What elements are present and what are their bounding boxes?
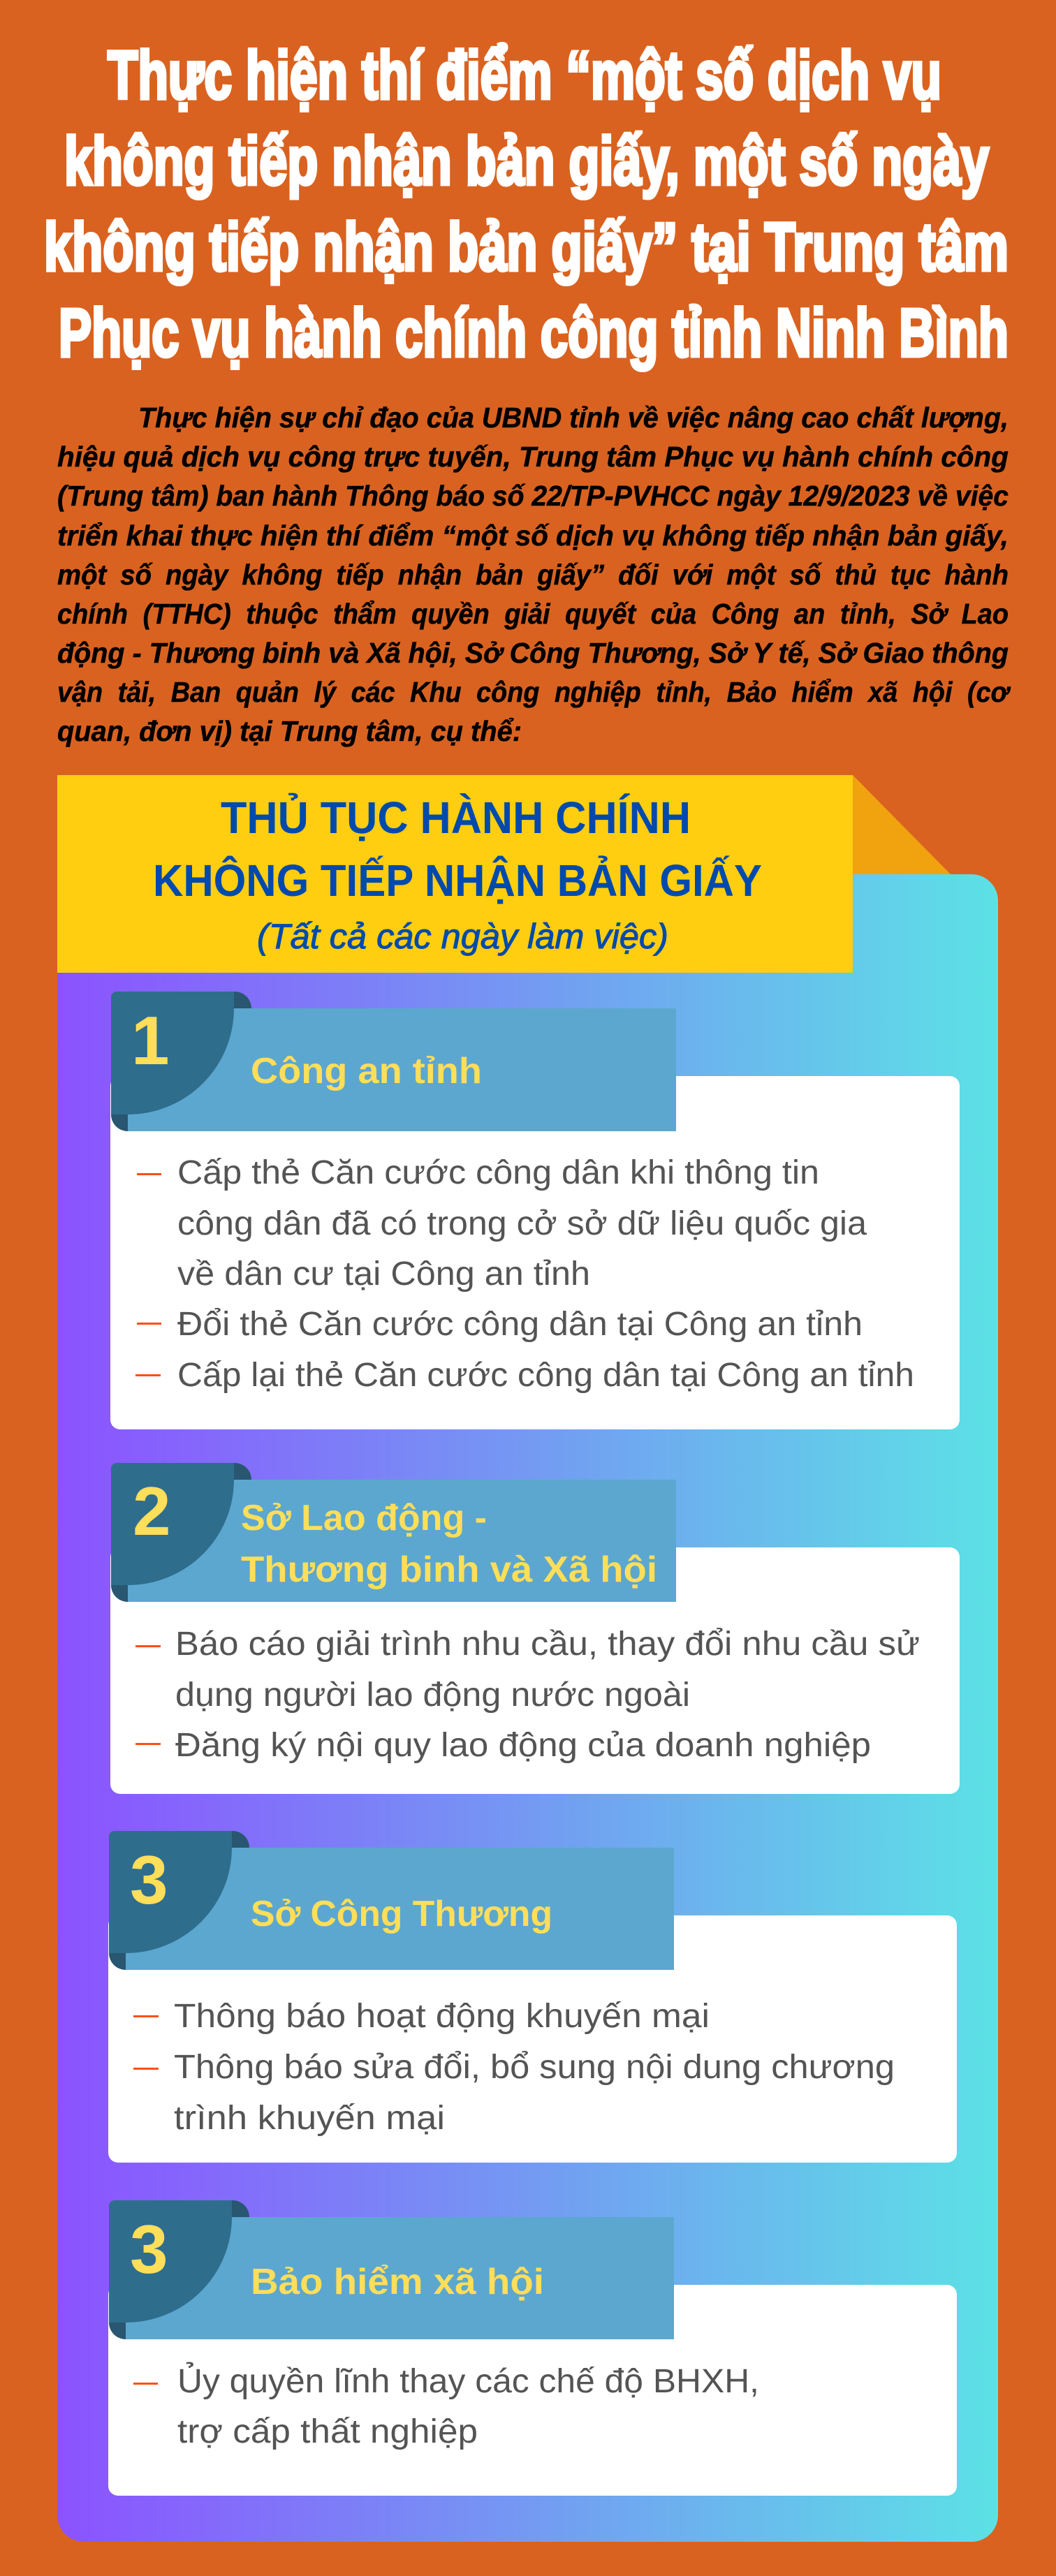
card 3: Sở Công Thương: Thông báo sửa đổi, bổ sung nội dung chương <box>174 2049 895 2086</box>
fold triangle behind header <box>853 775 951 875</box>
header banner: KHÔNG TIẾP NHẬN BẢN GIẤY <box>153 855 762 906</box>
card 2: Sở Lao động - Thương binh và Xã hội: Sở Lao động - <box>241 1498 487 1538</box>
card 2: Sở Lao động - Thương binh và Xã hội: Báo cáo giải trình nhu cầu, thay đổi nhu cầu sử <box>175 1626 920 1663</box>
card 3: Sở Công Thương: trình khuyến mại <box>174 2100 445 2137</box>
card 3: Sở Công Thương <box>108 1831 957 2163</box>
card 1: Công an tỉnh <box>110 992 960 1429</box>
card 4: Bảo hiểm xã hội: Ủy quyền lĩnh thay các chế độ BHXH, <box>177 2362 759 2400</box>
card 2: Sở Lao động - Thương binh và Xã hội: dụng người lao động nước ngoài <box>175 1677 690 1714</box>
card 1: Công an tỉnh: Cấp lại thẻ Căn cước công dân tại Công an tỉnh <box>177 1357 914 1394</box>
card 3: Sở Công Thương: 3 <box>130 1841 168 1918</box>
card 1: Công an tỉnh: Công an tỉnh <box>251 1051 482 1091</box>
card 3: Sở Công Thương: Sở Công Thương <box>251 1894 552 1934</box>
header banner: (Tất cả các ngày làm việc) <box>257 917 668 956</box>
header banner: THỦ TỤC HÀNH CHÍNH <box>221 792 691 843</box>
card 4: Bảo hiểm xã hội <box>108 2200 957 2496</box>
intro paragraph: quan, đơn vị) tại Trung tâm, cụ thể: <box>57 715 522 747</box>
intro paragraph: động - Thương binh và Xã hội, Sở Công Thương, Sở Y tế, Sở Giao thông <box>57 637 1009 669</box>
card 2: Sở Lao động - Thương binh và Xã hội: Đăng ký nội quy lao động của doanh nghiệp <box>175 1727 871 1764</box>
intro paragraph: triển khai thực hiện thí điểm “một số dịch vụ không tiếp nhận bản giấy, <box>57 520 1009 552</box>
intro paragraph <box>57 402 1011 747</box>
intro paragraph: một số ngày không tiếp nhận bản giấy” đối với một số thủ tục hành <box>57 559 1009 591</box>
card 4: Bảo hiểm xã hội: Bảo hiểm xã hội <box>251 2262 544 2302</box>
card 4: Bảo hiểm xã hội: trợ cấp thất nghiệp <box>177 2413 478 2450</box>
card 1: Công an tỉnh: Cấp thẻ Căn cước công dân khi thông tin <box>177 1154 819 1191</box>
card 1: Công an tỉnh: Đổi thẻ Căn cước công dân tại Công an tỉnh <box>177 1306 863 1343</box>
intro paragraph: Thực hiện sự chỉ đạo của UBND tỉnh về việc nâng cao chất lượng, <box>138 402 1009 434</box>
card 1: Công an tỉnh: về dân cư tại Công an tỉnh <box>177 1256 590 1293</box>
card 2: Sở Lao động - Thương binh và Xã hội: Thương binh và Xã hội <box>241 1550 657 1590</box>
card 2: Sở Lao động - Thương binh và Xã hội <box>110 1463 960 1794</box>
card 4: Bảo hiểm xã hội: 3 <box>130 2211 168 2288</box>
gradient main panel <box>57 874 998 2542</box>
title <box>44 37 1009 371</box>
card 1: Công an tỉnh: 1 <box>131 1002 170 1079</box>
card 2: Sở Lao động - Thương binh và Xã hội: 2 <box>133 1473 171 1550</box>
intro paragraph: (Trung tâm) ban hành Thông báo số 22/TP-PVHCC ngày 12/9/2023 về việc <box>57 480 1009 512</box>
card 3: Sở Công Thương: Thông báo hoạt động khuyến mại <box>174 1998 710 2035</box>
card 1: Công an tỉnh: công dân đã có trong cở sở dữ liệu quốc gia <box>177 1205 867 1242</box>
intro paragraph: hiệu quả dịch vụ công trực tuyến, Trung tâm Phục vụ hành chính công <box>57 441 1009 473</box>
header banner <box>57 775 853 973</box>
